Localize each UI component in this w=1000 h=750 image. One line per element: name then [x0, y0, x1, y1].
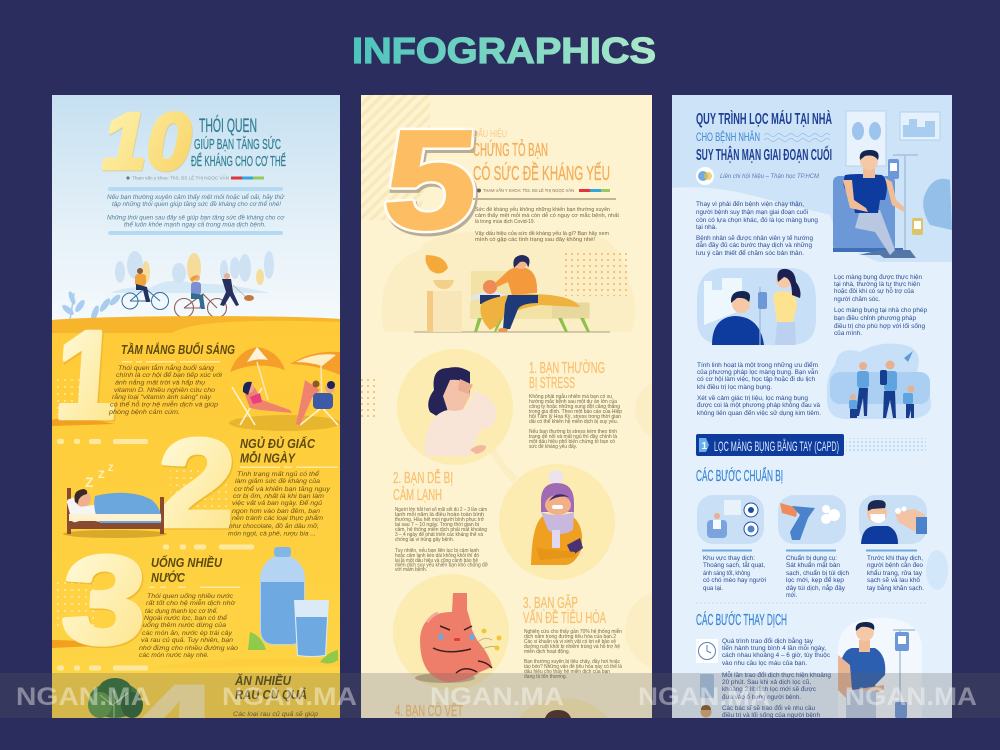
- text: flexibility: không liên quan đến việc sử dụng kim tiêm.: [697, 408, 821, 417]
- body 1: Thói quen tắm nắng buổi sáng: [118, 363, 214, 372]
- prep step 2: sạch, chuẩn bị túi dịch: [786, 569, 849, 577]
- section banner: LỌC MÀNG BỤNG BẰNG TAY (CAPD): [714, 437, 839, 454]
- step: clock: vào nhu cầu lọc máu của bạn.: [722, 658, 807, 667]
- panel background: [672, 95, 952, 718]
- byline and ribbon: [126, 176, 264, 180]
- body 3: uống thêm nước dừng của: [143, 621, 226, 629]
- intro text: Bệnh nhân sẽ được nhân viên y tế hướng: [696, 233, 813, 242]
- watermark band: [0, 673, 1000, 718]
- body 2: cơ thể và khiến bạn tăng nguy: [234, 485, 331, 493]
- illustration: mother and sick child: [414, 250, 631, 332]
- title: SUY THẬN MẠN GIAI ĐOẠN CUỐI: [696, 144, 832, 164]
- heading 3: NƯỚC: [151, 570, 186, 585]
- text: home peritoneal dialysis: tại nhà, thường là tự thực hiện: [834, 281, 920, 288]
- body 3: Thói quen uống nhiều nước: [147, 591, 234, 600]
- number 3: [62, 554, 144, 648]
- body 1: ánh nắng mặt trời và hấp thụ: [115, 378, 205, 386]
- text: home peritoneal dialysis: người chăm sóc.: [834, 296, 880, 303]
- heading sign 3: 3. BẠN GẶP: [523, 593, 578, 612]
- intro text: [107, 187, 285, 235]
- body sign 2: với mầm bệnh.: [395, 567, 427, 573]
- body sign 1: dài có thể khiến hệ miễn dịch bị suy yếu.: [529, 418, 618, 425]
- body 2: làm giảm sức đề kháng của: [235, 476, 320, 485]
- text: home peritoneal dialysis: bạn điều chỉnh phương pháp: [834, 313, 916, 322]
- number 1: 1: [53, 307, 124, 446]
- section banner: 1: [702, 441, 708, 452]
- body sign 3: Các vi khuẩn và vi sinh vật có lợi sẽ bảo vệ: [524, 638, 616, 645]
- body sign 2: lạnh mỗi năm là điều hoàn toàn bình: [395, 511, 484, 518]
- step: fluid bag: 20 phút. Sau khi xả dịch lọc cũ,: [722, 679, 811, 686]
- watermark band: NGAN.MA: [16, 683, 151, 711]
- step: clock: [696, 636, 831, 667]
- dashes 2: [57, 439, 148, 444]
- body 3: các món ăn, nước ép trái cây: [142, 630, 233, 637]
- step: doctor: Các bác sĩ sẽ trao đổi về nhu cầu: [722, 703, 815, 712]
- big number 5: 5: [378, 101, 484, 258]
- heading: habits: GIÚP BẠN TĂNG SỨC: [194, 136, 281, 153]
- heading sign 2: CẢM LẠNH: [393, 485, 442, 504]
- heading: CHỨNG TỎ BẠN: [473, 139, 548, 160]
- habit 4: vegetables: [57, 666, 318, 718]
- body sign 1: [529, 393, 622, 450]
- text: home peritoneal dialysis: của mình.: [834, 329, 862, 337]
- sign 1: stress: [397, 349, 622, 465]
- connector band: [490, 445, 515, 480]
- intro text: Thay vì phải đến bệnh viện chạy thận,: [696, 199, 804, 208]
- heading: [473, 127, 610, 185]
- heading sign 2: 2. BẠN DỄ BỊ: [393, 468, 453, 487]
- body sign 3: táo bón? Những vấn đề tiêu hóa này có thể là: [524, 663, 622, 670]
- text: flexibility: của phương pháp lọc màng bụng. Bạn vẫn: [697, 367, 818, 376]
- circle illustration: sad stomach: [393, 574, 509, 690]
- body 2: nên tránh các loại thực phẩm: [232, 514, 324, 522]
- heading: exchange steps: CÁC BƯỚC THAY DỊCH: [696, 610, 787, 629]
- text: flexibility: được coi là một phương pháp không đau và: [697, 402, 820, 409]
- logo: Liên chi hội Niệu – Thận học TP.HCM: [720, 174, 819, 180]
- body 3: [139, 591, 238, 659]
- big number 10: [102, 111, 193, 172]
- body sign 1: hướng mắc bệnh sau một dự án lớn của: [529, 398, 617, 405]
- body sign 3: dịch nằm trong đường tiêu hóa của bạn.2: [524, 633, 616, 640]
- body 3: các món nước này nhé.: [139, 652, 209, 659]
- body 2: việc vất vả ban ngày. Để ngủ: [232, 499, 322, 507]
- side decoration: [361, 375, 705, 670]
- heading sign 1: BỊ STRESS: [529, 375, 575, 392]
- prep step 2: Sát khuẩn mặt bàn: [786, 561, 840, 569]
- title: QUY TRÌNH LỌC MÁU TẠI NHÀ: [696, 109, 832, 128]
- prep step 3: sạch sẽ và lau khô: [867, 577, 920, 584]
- number 3: 3: [60, 532, 151, 671]
- habit 2: sleep: [57, 436, 338, 538]
- illustration: sleeping man: Z: [98, 469, 105, 481]
- number 1: [58, 330, 116, 422]
- body 2: [228, 470, 331, 538]
- number 1: 1: [51, 305, 123, 445]
- body 2: cơ bị ốm, nhất là khi bạn làm: [233, 492, 325, 500]
- background blob: [382, 232, 635, 332]
- body sign 2: Tuy nhiên, nếu bạn liên tục bị cảm lạnh: [395, 548, 479, 554]
- text: flexibility: Xét về cảm giác trị liệu, lọc màng bụng: [697, 393, 808, 402]
- body sign 2: lại sau 7 – 10 ngày. Trong thời gian bị: [395, 522, 479, 528]
- illustration: sleeping man: Z: [108, 463, 114, 473]
- body 2: ngon hơn vào ban đêm, bạn: [232, 508, 320, 515]
- body 3: nhớ đừng cho nhiều đường vào: [139, 643, 238, 652]
- watermark band: NGAN.MA: [222, 683, 357, 711]
- body sign 3: Nghiên cứu cho thấy gần 70% hệ thống miễn: [524, 628, 622, 635]
- body 1: [108, 363, 223, 416]
- illustration: nurse and patient: [697, 268, 816, 345]
- step: clock: tiến hành trung bình 4 lần mỗi ngày,: [722, 643, 826, 652]
- body sign 1: trong gia đình. Theo một báo cáo của Hiệp: [529, 408, 622, 415]
- heading: DẤU HIỆU: [473, 127, 507, 140]
- heading sign 1: [529, 358, 605, 392]
- intro text: thể luôn khỏe mạnh ngay cả trong mùa dịch bệnh.: [124, 220, 266, 228]
- step: clock: cách nhau khoảng 4 – 6 giờ, tùy thuộc: [722, 652, 831, 659]
- prep step 3: [859, 495, 927, 592]
- intro text: còn có lựa chọn khác, đó là lọc màng bụng: [696, 217, 818, 224]
- body sign 2: cảm, hệ thống miễn dịch phải mất khoảng: [395, 526, 487, 533]
- step: fluid bag: Mỗi lần trao đổi dịch thực hiện khoảng: [722, 670, 831, 679]
- watermark band: NGAN.MA: [845, 683, 977, 711]
- intro text: dẫn đầy đủ các bước thay dịch và những: [696, 240, 812, 249]
- step: clock: Quá trình trao đổi dịch bằng tay: [722, 636, 814, 645]
- text: home peritoneal dialysis: Lọc màng bụng tại nhà cho phép: [834, 307, 927, 314]
- title: [696, 109, 832, 164]
- illustration: family travelling: [827, 344, 931, 419]
- number 2: 2: [155, 415, 240, 554]
- panel: 5 signs: [361, 95, 652, 718]
- body sign 3: miễn dịch hoạt động.: [524, 648, 570, 655]
- panel: home dialysis: [672, 95, 952, 719]
- step: doctor: [700, 703, 820, 719]
- body 2: món ngọt, cà phê, rượu bia ...: [228, 530, 316, 538]
- illustration: water bottle and glass: [248, 547, 338, 664]
- intro text: [696, 199, 818, 257]
- habit 1: morning sun: [58, 330, 340, 431]
- prep step 3: Trước khi thay dịch,: [867, 555, 923, 562]
- body 1: rằng loại "vitamin ánh sáng" này: [112, 392, 212, 401]
- sign 3: digestion: [393, 574, 622, 690]
- intro text: cảm thấy mệt mỏi mà còn dễ có nguy cơ mắc bệnh, nhất: [475, 212, 620, 219]
- body sign 1: sức đề kháng yếu đấy.: [529, 444, 577, 450]
- illustration: patient in chair: [833, 111, 952, 258]
- body sign 2: [395, 506, 489, 573]
- intro text: người bệnh suy thận mạn giai đoạn cuối: [696, 207, 809, 216]
- sign 4: heading and illustration: 4. BẠN CÓ VẾT: [395, 701, 463, 720]
- kidney decoration: [926, 550, 948, 590]
- text: home peritoneal dialysis: điều trị cho phù hợp với lối sống: [834, 321, 925, 330]
- body 1: có thể hỗ trợ hệ miễn dịch và giúp: [110, 400, 218, 408]
- heading 4: ĂN NHIỀU: [234, 673, 292, 688]
- body 4: Các loại rau củ quả sẽ giúp: [233, 710, 318, 718]
- body sign 1: một dấu hiệu phổ biến chứng tỏ bạn có: [529, 438, 615, 445]
- body 3: và rau củ quả. Tuy nhiên, bạn: [141, 636, 233, 644]
- body sign 3: [524, 628, 622, 680]
- habit 3: drink water: [62, 544, 338, 664]
- intro text: Vậy dấu hiệu của sức đề kháng yếu là gì? Bạn hãy xem: [475, 230, 609, 237]
- text: flexibility: có cơ hội làm việc, học tập hoặc đi du lịch: [697, 376, 815, 383]
- heading 1: TẦM NẮNG BUỔI SÁNG: [121, 342, 235, 357]
- heading sign 1: 1. BẠN THƯỜNG: [529, 358, 605, 377]
- sign 2: colds: [393, 464, 615, 580]
- heading sign 2: [393, 468, 453, 504]
- section banner: [696, 434, 926, 456]
- prep step 2: mới.: [786, 592, 797, 599]
- heading 4: [234, 673, 307, 702]
- body sign 3: đang bị tổn thương.: [524, 673, 567, 680]
- dashes 3: [163, 544, 254, 550]
- illustration: beach: [229, 347, 341, 431]
- illustration: greens: [88, 678, 143, 718]
- number 2: [158, 436, 233, 530]
- body sign 2: miễn dịch suy yếu khiến bạn khó chống đỡ: [395, 562, 489, 568]
- body sign 1: Nếu bạn thường bị stress kèm theo tính: [529, 429, 617, 435]
- illustration: patient with IV: [838, 618, 922, 718]
- body sign 1: công ty hoặc những xung đột căng thẳng: [529, 403, 620, 410]
- illustration: cyclists and trees: [62, 251, 274, 319]
- dot texture: [54, 375, 230, 630]
- prep step 3: người bệnh cần đeo: [867, 560, 923, 569]
- big number 10: 10: [102, 96, 191, 186]
- intro text: tập những thói quen giúp tăng sức đề kháng cho cơ thể nhé!: [112, 199, 281, 208]
- text: flexibility: [697, 361, 821, 417]
- step: fluid bag: [700, 670, 831, 701]
- heading sign 3: [523, 593, 606, 627]
- text: flexibility: khi điều trị lọc màng bụng.: [697, 382, 772, 391]
- text: home peritoneal dialysis: hoặc đôi khi có sự hỗ trợ của: [834, 286, 914, 295]
- dashes 1: [122, 361, 220, 362]
- big number 5: [384, 128, 478, 236]
- watermark band: NGAN.MA: [638, 683, 770, 711]
- body 1: vitamin D. Nhiều nghiên cứu cho: [114, 385, 215, 394]
- heading: habits: [191, 115, 286, 170]
- body 3: tác dụng thanh lọc cơ thể.: [145, 607, 218, 615]
- sign 4: heading and illustration: [395, 698, 608, 720]
- dashes 4: [57, 666, 148, 670]
- top blue wave background: [672, 95, 952, 262]
- heading 2: [240, 436, 316, 462]
- illustration: sleeping man: Z: [85, 474, 94, 490]
- step: doctor: điều trị và lối sống của người bệnh: [722, 710, 820, 719]
- prep step 1: ánh sáng tốt, không: [703, 568, 750, 577]
- logo: [696, 167, 819, 185]
- intro text: Những thói quen sau đây sẽ giúp bạn tăng sức đề kháng cho cơ: [107, 212, 285, 222]
- illustration: sleeping man: [63, 463, 167, 538]
- body sign 3: đường ruột khỏi bị nhiễm trùng và hỗ trợ hệ: [524, 643, 620, 650]
- circle illustration: shivering person: [499, 464, 615, 580]
- number 2: 2: [154, 413, 239, 553]
- number 3: 3: [59, 530, 150, 670]
- prep step 2: dây túi dịch, nắp đậy: [786, 583, 846, 592]
- intro text: Sức đề kháng yếu không những khiến bạn thường xuyên: [475, 207, 610, 213]
- title: CHO BỆNH NHÂN: [696, 129, 760, 144]
- body 2: Tình trạng mất ngủ có thể: [237, 470, 319, 478]
- prep step 2: [778, 495, 849, 599]
- text: home peritoneal dialysis: [834, 274, 927, 337]
- heading: habits: ĐỂ KHÁNG CHO CƠ THỂ: [191, 152, 286, 170]
- panel: 10 habits: [51, 95, 341, 718]
- prep step 1: qua lại.: [703, 585, 723, 592]
- body sign 1: trạng dễ nổi và mất ngủ thì đây chính là: [529, 433, 617, 440]
- body sign 2: 3 – 4 ngày để phát triển các kháng thể và: [395, 531, 483, 538]
- body sign 1: Không phải ngẫu nhiên mà bạn có xu: [529, 393, 612, 400]
- prep step 1: có chó mèo hay người: [703, 577, 767, 584]
- intro text: tại nhà.: [696, 224, 717, 231]
- body 1: phòng bệnh cảm cúm.: [108, 408, 180, 416]
- heading: preparation: CÁC BƯỚC CHUẨN BỊ: [696, 466, 783, 485]
- prep step 1: Thoáng sạch, tắt quạt,: [703, 560, 765, 569]
- prep step 1: [697, 495, 767, 592]
- text: flexibility: Tính linh hoạt là một trong những ưu điểm: [697, 361, 818, 369]
- intro text: là trong mùa dịch Covid-19.: [475, 219, 535, 225]
- byline and ribbon: Tham vấn y khoa: ThS. BS LÊ THỊ NGỌC VÂN: [132, 176, 229, 180]
- body sign 2: chống lại vi trùng gây bệnh.: [395, 537, 454, 543]
- body 3: Ngoài nước lọc, bạn có thể: [144, 614, 227, 622]
- prep step 2: Chuẩn bị dụng cụ:: [786, 554, 837, 562]
- heading sign 3: VẤN ĐỀ TIÊU HÓA: [523, 608, 606, 627]
- heading 2: MỖI NGÀY: [240, 450, 296, 466]
- text: home peritoneal dialysis: Lọc màng bụng được thực hiện: [834, 274, 922, 281]
- body sign 3: dấu hiệu cho thấy hệ miễn dịch của bạn: [524, 668, 610, 675]
- yellow section background: [52, 316, 340, 718]
- byline: [473, 188, 616, 200]
- main title: INFOGRAPHICS: [352, 30, 656, 71]
- heading 3: UỐNG NHIỀU: [151, 555, 223, 570]
- byline: THAM VẤN Y KHOA: ThS. BS LÊ THỊ NGỌC VÂN: [483, 188, 574, 193]
- prep step 1: Khu vực thay dịch:: [703, 555, 755, 562]
- body sign 2: thường. Hầu hết mọi người bình phục trở: [395, 516, 485, 523]
- intro text: lưu ý cần thiết để chăm sóc bản thân.: [696, 248, 804, 257]
- body 1: chính là cơ hội để bạn tiếp xúc với: [116, 371, 223, 379]
- body sign 1: hội Tâm lý Hoa Kỳ, stress trong thời gian: [529, 414, 621, 420]
- body 2: như chocolate, đồ ăn dầu mỡ,: [229, 521, 319, 530]
- intro text: Nếu bạn thường xuyên cảm thấy mệt mỏi hoặc uể oải, hãy thử: [107, 193, 285, 201]
- dashes: [240, 466, 338, 468]
- step: fluid bag: khoảng 2 lít dịch lọc mới sẽ được: [722, 686, 817, 693]
- panel sky background: [52, 95, 340, 330]
- intro text: mình có gặp các tình trạng sau đây không nhé!: [475, 237, 595, 243]
- stripes decoration: [361, 95, 430, 220]
- body sign 2: Người lớn hắt hơi sổ mũi sốt dù 2 – 3 lần cảm: [395, 506, 487, 513]
- big number 10: 10: [103, 98, 192, 187]
- panel background: [361, 95, 652, 718]
- circle illustration: stressed woman: [397, 349, 513, 465]
- prep step 3: tay bằng khăn sạch.: [867, 583, 924, 592]
- step: fluid bag: đưa vào ổ bụng người bệnh.: [722, 693, 801, 701]
- big number 5: 5: [378, 101, 484, 258]
- body sign 3: Bạn thường xuyên bị tiêu chảy, đầy hơi hoặc: [524, 659, 620, 665]
- body sign 2: lại là một dấu hiệu và cũng cảnh báo hệ: [395, 558, 478, 564]
- body sign 2: hoặc cảm lạnh kéo dài không khỏi thì đó: [395, 552, 479, 559]
- heading: CÓ SỨC ĐỀ KHÁNG YẾU: [473, 162, 610, 185]
- prep step 3: khẩu trang, rửa tay: [867, 569, 923, 577]
- watermark band: NGAN.MA: [430, 683, 564, 711]
- body 3: rất tốt cho hệ miễn dịch nhờ: [146, 598, 236, 607]
- heading 2: NGỦ ĐỦ GIẤC: [240, 436, 316, 451]
- heading: habits: THÓI QUEN: [199, 115, 257, 137]
- heading 4: RAU CỦ QUẢ: [235, 687, 307, 702]
- big number 5: 5: [380, 104, 486, 261]
- intro text: [475, 207, 620, 243]
- dashes: [149, 586, 240, 588]
- heading 3: [151, 555, 222, 582]
- prep step 2: lọc mới, kẹp để kẹp: [786, 576, 844, 584]
